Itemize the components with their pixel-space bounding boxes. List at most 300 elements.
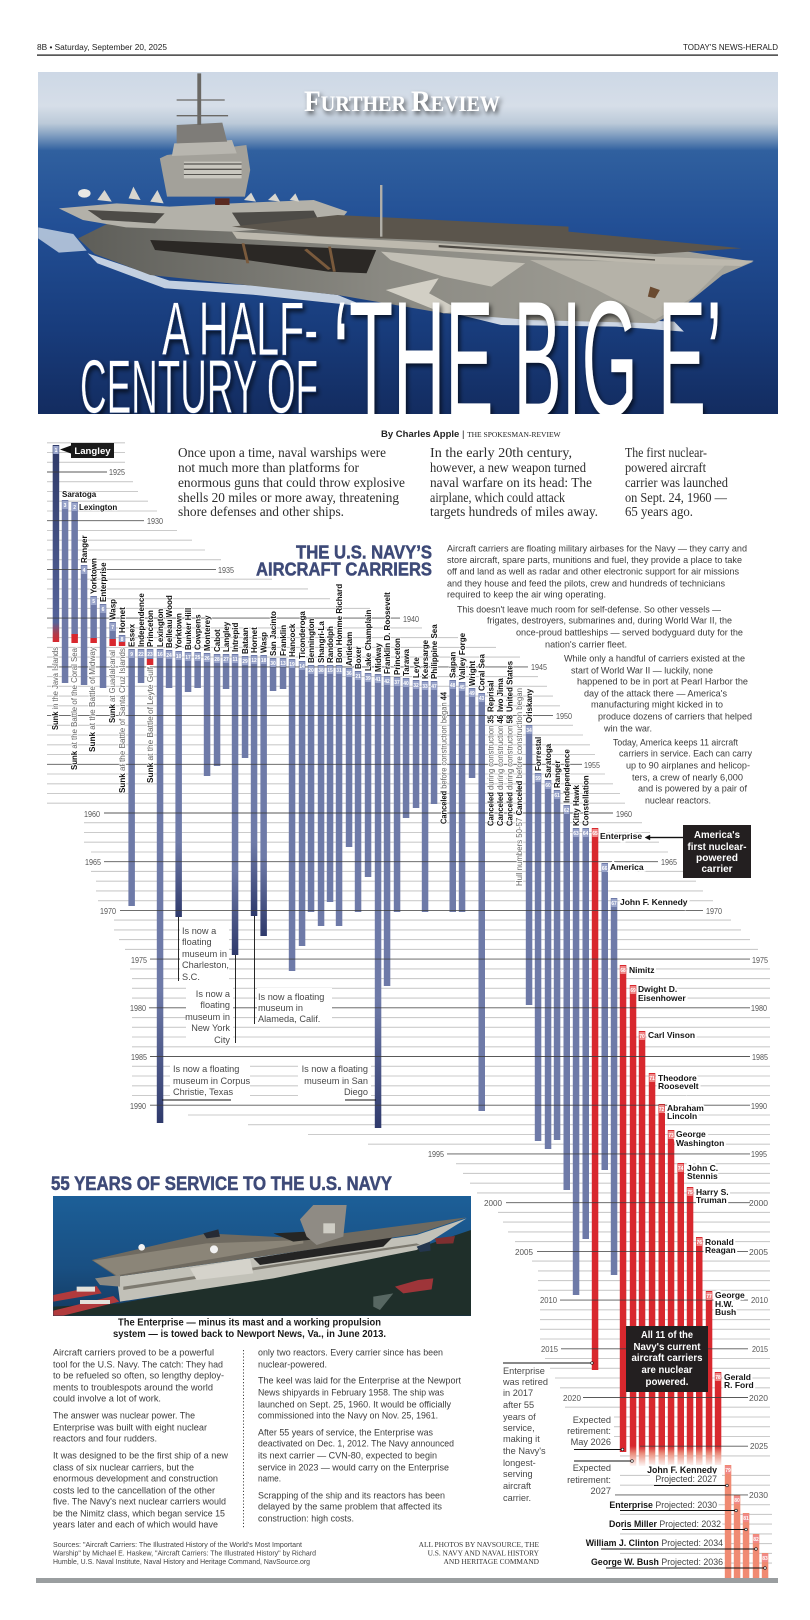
photo credit: AND HERITAGE COMMAND: [444, 1557, 540, 1566]
hull numbers on bars: 38: [318, 668, 324, 674]
bar: USS Enterprise, first nuclear carrier: [592, 828, 598, 1370]
note: Charleston museum: floating: [182, 937, 212, 947]
rotated notes: canceled ships and hull numbers: Canceled before construction began 44: [439, 692, 449, 824]
labels: nuclear-era carrier names: Eisenhower: [638, 993, 686, 1003]
text block: carriers explained: [447, 544, 752, 806]
hull numbers on bars: 9: [130, 652, 133, 658]
note: Charleston museum: [178, 917, 229, 983]
rotated ship names: early and WWII carriers: Wasp: [260, 632, 269, 653]
labels: nuclear-era carrier names: George: [715, 1290, 745, 1300]
year labels: left and right axis: 1980: [751, 1003, 767, 1013]
year labels: left and right axis: 1990: [130, 1101, 146, 1111]
hull numbers on bars: 63: [573, 831, 579, 837]
intro text: column 1: shells 20 miles or more away, threatening: [178, 491, 399, 506]
photo credit: [419, 1540, 540, 1566]
photo caption: system — is towed back to Newport News, Va., in June 2013.: [113, 1329, 386, 1340]
hull numbers on bars: 47: [431, 684, 437, 690]
labels: nuclear-era carrier names: Ronald: [705, 1237, 734, 1247]
note: Enterprise retired: after 55: [503, 1400, 534, 1410]
rotated ship names: early and WWII carriers: Bunker Hill: [184, 608, 193, 650]
text block: carriers explained: and they house and feed the pilots, crew and hundreds of technicians: [447, 578, 725, 590]
note: San Diego museum: museum in San: [304, 1076, 368, 1086]
rotated notes: ships sunk in battle: [50, 646, 155, 793]
chart grid: light year lines (decorative): [47, 443, 772, 1563]
hull numbers on bars: 29: [242, 659, 248, 665]
year labels: left and right axis: 1960: [616, 809, 632, 819]
note: Enterprise retired: service,: [503, 1423, 535, 1433]
callout: All 11 current carriers nuclear: [626, 1326, 708, 1392]
year labels: left and right axis: 1950: [556, 711, 572, 721]
text block: carriers explained: up to 90 airplanes and helicop-: [626, 760, 750, 772]
rotated notes: canceled ships and hull numbers: Canceled during construction 46: [495, 715, 505, 826]
hull numbers on bars: 33: [422, 684, 428, 690]
hull numbers on bars: 30: [270, 661, 276, 667]
hero photo: aircraft carrier at sea with title: CENTURY OF: [80, 345, 318, 430]
labels: nuclear-era carrier names: Enterprise: [600, 831, 642, 841]
labels: Saratoga and Lexington: Saratoga: [62, 490, 97, 499]
intro text: column 1: Once upon a time, naval warships were: [178, 446, 386, 461]
hull numbers on bars: 37: [394, 680, 400, 686]
hull numbers on bars: 76: [697, 1240, 702, 1246]
note: Alameda museum: Is now a floating: [258, 992, 324, 1002]
hull numbers on bars: 66: [602, 866, 608, 872]
photo credit: U.S. NAVY AND NAVAL HISTORY: [428, 1548, 540, 1558]
rotated ship names: early and WWII carriers: Lexington: [156, 609, 165, 647]
hull numbers on bars: 72: [659, 1107, 665, 1113]
note: Enterprise retired: serving: [503, 1469, 533, 1479]
labels: nuclear-era carrier names: Bush: [715, 1307, 736, 1317]
article text: column 1: be the Nimitz class, which began service 15: [53, 1508, 225, 1520]
rotated notes: canceled ships and hull numbers: Canceled during construction 35: [486, 715, 496, 826]
article text: column 1: enormous development and construction: [53, 1474, 218, 1484]
rotated ship names: early and WWII carriers: Princeton: [146, 610, 155, 647]
text block: carriers explained: While only a handful of carriers existed at the: [564, 654, 745, 664]
rotated ship names: early and WWII carriers: Franklin: [279, 625, 288, 656]
article text: column 1: could involve a lot of work.: [53, 1394, 161, 1404]
rotated notes: ships sunk in battle: Sunk in the Java Islands: [50, 647, 60, 730]
hull numbers on bars: 10: [176, 654, 182, 660]
hull numbers on bars: 18: [261, 658, 267, 664]
rotated ship names: early and WWII carriers: Cabot: [213, 629, 222, 652]
year labels: left and right axis: 2000: [749, 1198, 768, 1208]
intro text: column 1: not much more than platforms for: [178, 461, 359, 476]
hull numbers on bars: 83: [762, 1556, 768, 1562]
note: expected retirement May 2026: [562, 1412, 624, 1451]
rotated ship names: early and WWII carriers: Franklin D. Roosevelt: [383, 592, 392, 674]
hull numbers on bars: 42: [384, 679, 390, 685]
intro text: column 3: carrier was launched: [625, 476, 728, 491]
article text: column 2: only two reactors. Every carrier since has been: [258, 1348, 443, 1358]
note: San Diego museum: [298, 1061, 376, 1100]
note: Alameda museum: museum in: [258, 1003, 303, 1013]
header: folio line: [37, 42, 778, 56]
year labels: left and right axis: 2020: [749, 1393, 768, 1403]
hull numbers on bars: 11: [232, 657, 238, 663]
article text: column 2: launched on Sept. 25, 1960. It would be officially: [258, 1400, 451, 1410]
note: Enterprise retired: aircraft: [503, 1481, 532, 1491]
hull numbers on bars: 24: [166, 653, 172, 659]
year labels: left and right axis: 2015: [541, 1344, 558, 1354]
article text: column 1: reactors and four rudders.: [53, 1434, 157, 1444]
bars: early carriers, 1922 to 1945: [53, 445, 125, 688]
year labels: left and right axis: 2010: [751, 1295, 768, 1305]
note: Enterprise retired: years of: [503, 1412, 536, 1422]
hull numbers on bars: 12: [251, 658, 257, 664]
note: Charleston museum: Charleston,: [182, 960, 229, 970]
year labels: left and right axis: 1990: [751, 1101, 767, 1111]
note: New York museum: museum in: [185, 1012, 230, 1022]
labels: nuclear-era carrier names: Washington: [676, 1138, 724, 1148]
rotated ship names: early and WWII carriers: Tarawa: [402, 648, 411, 676]
chart grid: five-year lines (decorative): [47, 472, 750, 1495]
footer rule: [36, 1578, 778, 1583]
year labels: left and right axis: 1940: [403, 614, 419, 624]
hull numbers on bars: 82: [753, 1537, 759, 1543]
labels: nuclear-era carrier names: Reagan: [705, 1245, 736, 1255]
hull numbers on bars: 25: [195, 655, 201, 661]
text block: carriers explained: once-proud battleships — served bodyguard duty for the: [516, 628, 743, 638]
hull numbers on bars: 31: [336, 668, 342, 674]
text block: carriers explained: required to keep the air wing operating.: [447, 590, 606, 600]
rotated ship names: early and WWII carriers: Langley: [222, 621, 231, 652]
header: folio line: 8B • Saturday, September 20, 2025: [37, 42, 167, 52]
article text: column 1: tool for the U.S. Navy. The catch: They had: [53, 1360, 223, 1370]
rotated ship names: early and WWII carriers: Yorktown: [90, 558, 99, 594]
note: Enterprise retired: the Navy's: [503, 1446, 546, 1456]
text block: carriers explained: happened to be in port at Pearl Harbor the: [577, 676, 748, 688]
rotated ship names: early and WWII carriers: Ranger: [553, 760, 562, 788]
article text: column 2: nuclear-powered.: [258, 1360, 327, 1370]
labels: nuclear-era carrier names: Dwight D.: [638, 984, 677, 994]
article text: column 1: [53, 1348, 228, 1530]
article text: column 1: class of six nuclear carriers, but the: [53, 1462, 194, 1474]
rotated ship names: early and WWII carriers: Monterey: [203, 615, 212, 651]
note: expected retirement 2027: [562, 1460, 633, 1498]
callout: Langley: Langley: [74, 446, 111, 457]
rotated ship names: early and WWII carriers: Saratoga: [544, 743, 553, 778]
rotated ship names: early and WWII carriers: Hornet: [250, 627, 259, 653]
rotated ship names: early and WWII carriers: Hornet: [118, 607, 127, 633]
note: Enterprise retired: making it: [503, 1434, 540, 1444]
hull numbers on bars: 28: [214, 657, 220, 663]
text block: carriers explained: carriers in service. Each can carry: [619, 748, 752, 760]
intro text: column 1: [178, 446, 405, 520]
hull numbers on bars: 3: [64, 503, 67, 509]
rotated ship names: early and WWII carriers: Intrepid: [231, 623, 240, 652]
hull numbers on bars: 80: [734, 1498, 740, 1504]
labels: nuclear-era carrier names: Harry S.: [696, 1187, 729, 1197]
number tags on bars (decorative backgrounds): [53, 446, 617, 907]
note: Alameda museum: [254, 916, 332, 1025]
note: expected retirement 2027: 2027: [591, 1486, 611, 1496]
hull numbers on bars: 32: [413, 683, 419, 689]
heading: The U.S. Navy's aircraft carriers: [256, 542, 432, 580]
labels: nuclear-era carrier names: Truman: [696, 1195, 727, 1205]
note: San Diego museum: Diego: [344, 1087, 368, 1097]
hull numbers on bars: 27: [223, 657, 229, 663]
note: Charleston museum: Is now a: [182, 926, 217, 936]
rotated ship names: early and WWII carriers: Constellation: [582, 775, 591, 826]
year labels: left and right axis: 1925: [109, 467, 125, 477]
rotated ship names: early and WWII carriers: Belleau Wood: [165, 595, 174, 648]
year labels: left and right axis: 1970: [706, 906, 722, 916]
text block: carriers explained: ters, a crew of nearly 6,000: [632, 772, 743, 784]
intro text: column 3: [625, 446, 728, 520]
note: Charleston museum: museum in: [182, 949, 227, 959]
labels: nuclear-era carrier names: Theodore: [658, 1073, 697, 1083]
rotated ship names: early and WWII carriers: Independence: [563, 749, 572, 803]
rotated ship names: early and WWII carriers: Oriskany: [525, 688, 534, 723]
article text: column 1: The answer was nuclear power. The: [53, 1410, 195, 1422]
hull numbers on bars: 16: [157, 652, 163, 658]
hull numbers on bars: 74: [678, 1166, 684, 1172]
article text: column 1: years later and each of which would have: [53, 1520, 218, 1530]
hull numbers on bars: 77: [706, 1294, 712, 1300]
title: A half-century of: [81, 302, 321, 414]
labels: nuclear-era carrier names: Roosevelt: [658, 1081, 699, 1091]
hull numbers on bars: 67: [611, 901, 617, 907]
labels: nuclear-era carrier names: America: [610, 862, 644, 872]
rotated ship names: early and WWII carriers: Philippine Sea: [430, 624, 439, 679]
bars: postwar conventional carriers: [526, 725, 617, 1295]
text block: carriers explained: manufacturing might kicked in to: [591, 700, 723, 710]
note: expected retirement 2027: Expected: [573, 1463, 611, 1473]
labels: nuclear-era carrier names: Carl Vinson: [648, 1030, 695, 1040]
bars: World War II era carriers: [128, 649, 485, 1128]
hull numbers on bars: 70: [639, 1034, 645, 1040]
labels: nuclear-era carrier names: R. Ford: [724, 1380, 754, 1390]
rotated ship names: early and WWII carriers: Yorktown: [175, 613, 184, 649]
article text: column 2: deactivated on Dec. 1, 2012. The Navy announced: [258, 1438, 454, 1450]
bars: projected future carriers: [725, 1465, 768, 1578]
hull numbers on bars: 23: [147, 652, 153, 658]
rotated ship names: early and WWII carriers: Valley Forge: [458, 632, 467, 680]
year labels: left and right axis: 2030: [749, 1490, 768, 1500]
rotated ship names: early and WWII carriers: Princeton: [393, 638, 402, 675]
hull numbers on bars: 43: [479, 696, 485, 702]
hero photo: aircraft carrier at sea with title: [38, 72, 778, 451]
note: Enterprise retired: [500, 1362, 593, 1505]
hull numbers on bars: 49: [469, 691, 475, 697]
article text: column 2: its next carrier — CVN-80, expected to begin: [258, 1450, 437, 1462]
callout: America's first nuclear-powered carrier: carrier: [702, 864, 732, 875]
intro text: column 2: In the early 20th century,: [430, 446, 572, 461]
note: New York museum: floating: [200, 1000, 230, 1010]
text block: carriers explained: Today, America keeps 11 aircraft: [613, 738, 738, 748]
hull numbers on bars: 21: [355, 674, 361, 680]
labels: nuclear-era carrier names: Gerald: [724, 1372, 751, 1382]
rotated notes: ships sunk in battle: Sunk at Guadalcanal: [107, 650, 117, 723]
hull numbers on bars: 59: [535, 776, 541, 782]
rotated ship names: early and WWII carriers: Essex: [128, 623, 137, 647]
rotated notes: ships sunk in battle: Sunk at the Battle of the Coral Sea: [69, 648, 79, 770]
note: expected retirement May 2026: retirement:: [567, 1426, 611, 1436]
text block: carriers explained: nation's carrier fleet.: [545, 640, 627, 650]
note: Corpus Christi museum: museum in Corpus: [173, 1076, 251, 1086]
hull numbers on bars: 19: [289, 662, 295, 668]
note: Corpus Christi museum: [162, 1061, 251, 1100]
rotated ship names: early and WWII carriers: Enterprise: [99, 562, 108, 602]
labels: projected retirements and commissions: William J. Clinton Projected: 2034: [586, 1538, 723, 1548]
labels: nuclear-era carrier names: Lincoln: [667, 1111, 697, 1121]
article text: column 2: After 55 years of service, the Enterprise was: [258, 1428, 433, 1438]
year labels: left and right axis: 1985: [131, 1052, 147, 1062]
text block: carriers explained: store aircraft, spare parts, munitions and fuel, they provide a place to take: [447, 555, 742, 566]
year labels: left and right axis: 2025: [750, 1441, 768, 1451]
rotated ship names: early and WWII carriers: Kearsarge: [421, 639, 430, 679]
title: A half-century of: A HALF-: [162, 287, 318, 372]
hull numbers on bars: 64: [583, 831, 589, 837]
article text: column 2: name.: [258, 1474, 281, 1484]
year labels: left and right axis: 1985: [752, 1052, 768, 1062]
rotated ship names: early and WWII carriers: Ticonderoga: [298, 611, 307, 659]
rotated ship names: early and WWII carriers: Bataan: [241, 627, 250, 654]
text block: carriers explained: day of the attack there — America's: [584, 688, 727, 700]
header: folio line: TODAY'S NEWS-HERALD: [683, 42, 778, 52]
rotated ship names: early and WWII carriers: Saipan: [449, 652, 458, 678]
callout: America's first nuclear-powered carrier: America's: [694, 830, 740, 841]
callout: All 11 current carriers nuclear: are nuclear: [642, 1365, 692, 1376]
callout: All 11 current carriers nuclear: Navy's current: [634, 1342, 701, 1353]
callout: America's first nuclear-powered carrier: first nuclear-: [688, 842, 747, 853]
article text: column 1: ments to troublespots around the world: [53, 1382, 213, 1394]
note: Enterprise retired: in 2017: [503, 1388, 533, 1398]
hull numbers on bars: 41: [375, 677, 381, 683]
labels: nuclear-era carrier names: Abraham: [667, 1103, 704, 1113]
year labels: left and right axis: 1965: [85, 857, 101, 867]
text block: carriers explained: nuclear reactors.: [645, 796, 711, 806]
callout: All 11 current carriers nuclear: All 11 of the: [641, 1330, 693, 1341]
rotated ship names: early and WWII carriers: Bennington: [307, 618, 316, 663]
heading: The U.S. Navy's aircraft carriers: THE U.S. NAVY’S: [296, 542, 432, 562]
labels: projected retirements and commissions: Doris Miller Projected: 2032: [609, 1519, 721, 1529]
column divider (dotted): [242, 1350, 244, 1528]
rotated ship names: early and WWII carriers: [80, 535, 591, 826]
intro text: column 3: The first nuclear-: [625, 446, 707, 461]
hull numbers on bars: 45: [459, 685, 465, 691]
hull numbers on bars: 4: [83, 568, 86, 574]
year labels: left and right axis: [84, 467, 768, 1500]
rotated ship names: early and WWII carriers: Kitty Hawk: [572, 785, 581, 826]
hull numbers on bars: 1: [55, 448, 58, 454]
hull numbers on bars: 15: [327, 668, 333, 674]
year labels: left and right axis: 2020: [563, 1393, 581, 1403]
text block: carriers explained: start of World War II — luckily, none: [571, 666, 713, 676]
bars: current nuclear-powered carriers: [620, 965, 721, 1466]
note: Enterprise retired: carrier.: [503, 1493, 531, 1503]
hull numbers on bars: 69: [630, 988, 636, 994]
labels: nuclear-era carrier names: [600, 831, 754, 1390]
labels: projected retirements and commissions: Enterprise Projected: 2030: [609, 1500, 717, 1510]
hull numbers on bars: 5: [92, 599, 95, 605]
year labels: left and right axis: 2005: [749, 1247, 768, 1257]
note: expected retirement 2027: retirement:: [567, 1475, 611, 1485]
year labels: left and right axis: 1960: [84, 809, 100, 819]
year labels: left and right axis: 1995: [428, 1149, 444, 1159]
rotated ship names: early and WWII carriers: Coral Sea: [478, 654, 487, 691]
article text: column 1: to be refueled so often, so lengthy deploy-: [53, 1370, 224, 1382]
hull numbers on bars: 39: [365, 676, 371, 682]
rotated ship names: early and WWII carriers: Bon Homme Richard: [335, 584, 344, 663]
note: New York museum: New York: [191, 1023, 230, 1033]
hull numbers on bars: 79: [725, 1468, 731, 1474]
hull numbers on bars: 75: [687, 1190, 693, 1196]
callout: All 11 current carriers nuclear: powered.: [646, 1377, 689, 1388]
note: San Diego museum: Is now a floating: [302, 1064, 368, 1074]
rotated ship names: early and WWII carriers: San Jacinto: [269, 611, 278, 656]
number tags on red bars (decorative backgrounds): [592, 829, 768, 1562]
rotated notes: ships sunk in battle: Sunk at the Battle of Leyte Gulf: [145, 666, 155, 783]
hull numbers on bars: 26: [204, 656, 210, 662]
sources note: Sources: "Aircraft Carriers: The Illustrated History of the World's Most Important: [53, 1540, 303, 1549]
rotated ship names: early and WWII carriers: Leyte: [412, 657, 421, 678]
text block: carriers explained: This doesn't leave much room for self-defense. So other vessels —: [457, 604, 721, 616]
article text: column 1: Enterprise was built with eight nuclear: [53, 1422, 208, 1434]
sources note: [53, 1540, 316, 1566]
text block: carriers explained: win the war.: [603, 724, 652, 734]
year labels: left and right axis: 2015: [752, 1344, 768, 1354]
year labels: left and right axis: 2005: [515, 1247, 533, 1257]
article text: column 2: commissioned into the Navy on Nov. 25, 1961.: [258, 1410, 438, 1422]
rotated ship names: early and WWII carriers: Reprisal: [487, 680, 496, 712]
hull numbers on bars: 71: [649, 1076, 655, 1082]
text block: carriers explained: produce dozens of carriers that helped: [598, 712, 752, 722]
byline: By Charles Apple | THE SPOKESMAN-REVIEW: [381, 429, 562, 440]
year labels: left and right axis: 1975: [131, 955, 147, 965]
note: New York museum: City: [214, 1035, 230, 1045]
text block: carriers explained: frigates, destroyers, submarines and, during World War II, the: [487, 616, 732, 626]
sources note: Warship" by Michael E. Haskew, "Aircraft Carriers: The Illustrated History" by Richard: [53, 1548, 316, 1558]
year labels: left and right axis: 2010: [540, 1295, 557, 1305]
year labels: left and right axis: 1935: [218, 565, 234, 575]
article text: column 1: Aircraft carriers proved to be a powerful: [53, 1348, 214, 1358]
heading: 55 years of service: 55 YEARS OF SERVICE TO THE U.S. NAVY: [51, 1174, 392, 1195]
heading: The U.S. Navy's aircraft carriers: AIRCRAFT CARRIERS: [256, 558, 432, 580]
intro text: column 2: naval warfare on its head: The: [430, 476, 592, 491]
note: expected retirement May 2026: Expected: [573, 1415, 611, 1425]
labels: nuclear-era carrier names: H.W.: [715, 1299, 733, 1309]
rotated notes: canceled ships and hull numbers: [439, 688, 524, 886]
hull numbers on bars: 78: [715, 1375, 721, 1381]
labels: Saratoga and Lexington: Lexington: [79, 503, 117, 512]
rotated notes: canceled ships and hull numbers: Hull numbers 50-57 Canceled before construction began: [514, 688, 524, 886]
article text: column 2: Scrapping of the ship and its reactors has been: [258, 1490, 445, 1502]
photo: Enterprise under tow: [53, 1196, 471, 1316]
year labels: left and right axis: 1995: [751, 1149, 767, 1159]
intro text: column 3: on Sept. 24, 1960 —: [625, 491, 728, 506]
labels: projected retirements and commissions: [586, 1465, 766, 1569]
article text: column 1: five. The Navy's next nuclear carriers would: [53, 1496, 226, 1508]
year labels: left and right axis: 1965: [661, 857, 677, 867]
article text: column 2: construction: high costs.: [258, 1514, 354, 1524]
year labels: left and right axis: 1955: [584, 760, 600, 770]
note: New York museum: [185, 955, 236, 1045]
rotated ship names: early and WWII carriers: United States: [506, 660, 515, 712]
photo caption: The Enterprise — minus its mast and a working propulsion: [118, 1318, 381, 1328]
note: Enterprise retired: was retired: [502, 1377, 548, 1387]
article text: column 2: delayed by the same problem that affected its: [258, 1502, 442, 1512]
hull numbers on bars: 60: [545, 783, 551, 789]
hull numbers on bars: 6: [102, 607, 105, 613]
rotated ship names: early and WWII carriers: Independence: [137, 593, 146, 647]
rotated notes: ships sunk in battle: Sunk at the Battle of Santa Cruz Islands: [117, 648, 127, 793]
hull numbers on bars: 17: [185, 655, 191, 661]
intro text: column 2: however, a new weapon turned: [430, 461, 586, 476]
note: Charleston museum: S.C.: [182, 972, 200, 982]
hull numbers on bars: 22: [138, 652, 144, 658]
hull numbers on bars: 81: [743, 1516, 749, 1522]
article text: column 1: costs led to the cancellation of the other: [53, 1486, 216, 1496]
